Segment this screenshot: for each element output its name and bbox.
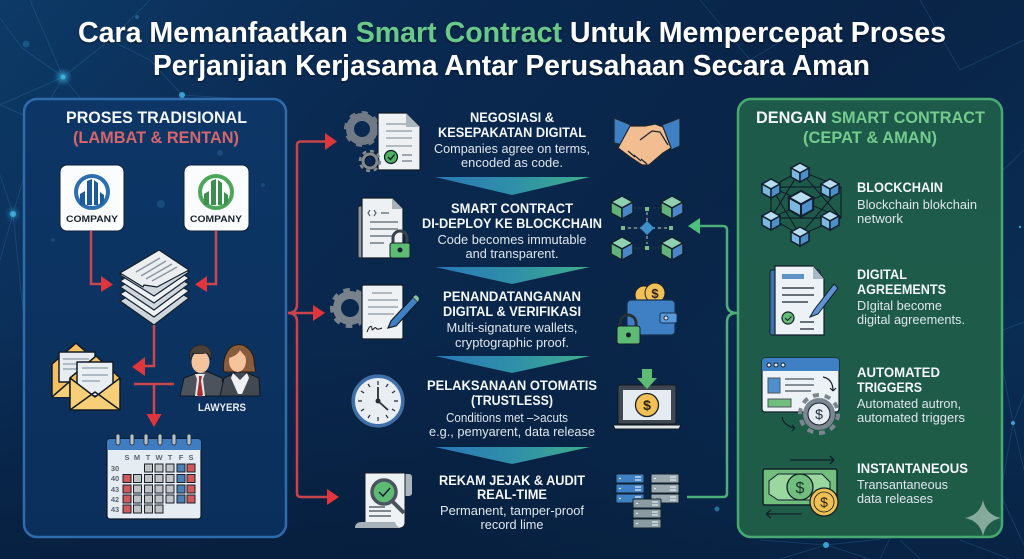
text: deploy: Code becomes immutable [438,232,586,247]
arrow: red bracket to steps [288,133,339,505]
text: penandatanganan [443,289,581,350]
text: digital agreements: digital agreements. [857,312,965,327]
icon: servers [616,474,679,528]
text: digital agreements: AGREEMENTS [857,282,946,297]
text: negosiasi: encoded as code. [461,155,563,170]
icon: calendar: 43 [111,505,119,514]
icon: calendar: 42 [111,495,119,504]
icon: calendar: S [124,453,130,462]
text: negosiasi [434,110,590,170]
text: instantaneous: data releases [857,491,933,506]
step 1: negosiasi [346,110,680,171]
heading: proses tradisional [66,108,247,147]
text: automated triggers [857,365,965,425]
title: Cara Memanfaatkan Smart Contract Untuk Mempercepat Proses [78,17,946,49]
icon: digital agreement [770,266,838,335]
step 4: pelaksanaan [351,369,681,439]
icon: calendar: M [134,453,140,462]
text: negosiasi: KESEPAKATAN DIGITAL [438,125,586,140]
arrow: step 2 to 3 [435,267,590,284]
item: instantaneous [763,456,968,518]
panel: dengan smart contract [738,99,1002,537]
text: blockchain: BLOCKCHAIN [857,180,943,195]
icon: clock [351,374,405,428]
icon: blockchain network [762,163,841,246]
icon: company green [184,165,249,231]
text: blockchain [857,180,977,226]
panel: process steps [332,110,683,532]
faint dots [51,150,265,242]
icon: laptop payment [613,369,681,429]
text: rekam jejak [439,473,586,532]
text: digital agreements: DIGITAL [857,267,907,282]
icon: code document with lock [358,198,410,258]
text: deploy: DI-DEPLOY KE BLOCKCHAIN [422,216,602,231]
item: blockchain [762,163,977,246]
text: digital agreements [857,267,965,327]
icon: company blue: COMPANY [66,214,118,224]
text: pelaksanaan: PELAKSANAAN OTOMATIS [427,378,597,393]
icon: lawyers [180,345,260,414]
icon: money transfer: $ [796,480,805,497]
icon: calendar [107,434,201,519]
item: digital agreements [770,266,965,335]
icon: calendar: F [179,453,184,462]
icon: money transfer [763,456,838,518]
icon: calendar: T [146,453,151,462]
text: instantaneous: Transantaneous [857,477,948,492]
icon: gear, document and pen [332,285,419,339]
text: automated triggers: Automated autron, [857,396,961,411]
icon: cube network [611,196,683,260]
icon: calendar: 30 [111,464,119,473]
heading: dengan smart contract: DENGAN SMART CONTRACT [756,108,986,127]
arrow: company blue to documents [91,231,113,292]
icon: calendar: W [155,453,163,462]
text: blockchain: network [857,211,903,226]
text: negosiasi: Companies agree on terms, [434,141,590,156]
text: penandatanganan: PENANDATANGANAN [443,289,581,304]
title: Perjanjian Kerjasama Antar Perusahaan Secara Aman [153,50,870,82]
arrow: step 1 to 2 [435,177,590,195]
arrow: green bracket to blockchain [687,218,737,497]
icon: company blue [60,165,124,231]
text: automated triggers: AUTOMATED [857,365,940,380]
step 2: deploy [358,196,683,261]
icon: calendar: 43 [111,485,119,494]
icon: document stack [120,250,189,325]
text: rekam jejak: REKAM JEJAK & AUDIT [439,473,586,488]
icon: audit scroll [355,473,412,528]
text: rekam jejak: Permanent, tamper-proof [440,503,584,518]
icon: laptop payment: $ [643,397,651,413]
text: deploy: SMART CONTRACT [451,201,574,216]
icon: wallet with lock: $ [651,286,659,301]
heading: proses tradisional: (LAMBAT & RENTAN) [73,128,239,147]
text: penandatanganan: DIGITAL & VERIFIKASI [443,304,581,319]
heading: dengan smart contract: (CEPAT & AMAN) [803,128,937,147]
text: rekam jejak: record lime [480,517,544,532]
icon: calendar: T [168,453,173,462]
text: instantaneous: INSTANTANEOUS [857,461,968,476]
text: instantaneous [857,461,968,506]
text: pelaksanaan: Conditions met –>acuts [446,410,568,425]
arrow: documents to envelopes [132,325,154,376]
icon: sparkle [965,500,1001,536]
text: pelaksanaan [427,378,597,439]
icon: envelopes [52,343,120,410]
icon: wallet with lock [617,283,677,344]
text: pelaksanaan: (TRUSTLESS) [471,393,553,408]
icon: gears and document [346,113,420,171]
heading: dengan smart contract [756,108,986,147]
icon: calendar: 40 [111,474,119,483]
text: rekam jejak: REAL-TIME [477,487,547,502]
arrow: company green to documents [195,231,216,292]
icon: automated window and gear [762,358,839,433]
text: automated triggers: TRIGGERS [857,380,922,395]
text: negosiasi: NEGOSIASI & [470,110,554,125]
text: penandatanganan: Multi-signature wallets, [446,320,578,335]
step 3: penandatanganan [332,283,677,350]
text: automated triggers: automated triggers [857,410,965,425]
icon: automated window and gear: $ [815,406,823,422]
icon: handshake [614,118,680,165]
text: blockchain: Blockchain blokchain [857,197,977,212]
text: penandatanganan: cryptographic proof. [455,335,569,350]
icon: calendar: S [188,453,194,462]
text: deploy: and transparent. [466,246,558,261]
icon: money transfer: $ [820,494,828,510]
icon: lawyers: LAWYERS [198,402,246,414]
arrow: lawyers to calendar [134,384,174,427]
title [78,17,946,82]
text: deploy [422,201,602,261]
text: pelaksanaan: e.g., pemyarent, data release [429,424,595,439]
step 5: rekam jejak [355,473,679,532]
panel: proses tradisional [24,99,286,537]
arrow: step 4 to 5 [435,447,590,464]
text: digital agreements: DIgital become [857,298,942,313]
icon: company green: COMPANY [190,214,242,224]
arrow: step 3 to 4 [435,356,590,373]
item: automated triggers [762,358,965,433]
heading: proses tradisional: PROSES TRADISIONAL [66,108,247,127]
